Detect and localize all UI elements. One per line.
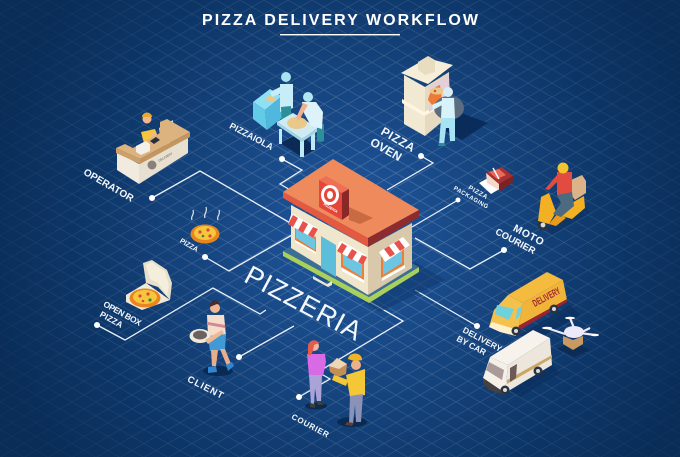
- icon: white delivery van: [483, 330, 560, 397]
- windows: [295, 226, 316, 252]
- label: Pizza Packaging: PIZZA: [467, 184, 489, 201]
- awnings: [288, 214, 319, 238]
- connector: pizzaiola: [279, 156, 302, 191]
- label: Moto Courier: MOTO: [511, 222, 546, 248]
- rear wheel: [573, 201, 583, 211]
- icon: pizzeria building: [283, 159, 445, 312]
- courier: [332, 353, 365, 426]
- label: Open box pizza: PIZZA: [98, 309, 125, 330]
- icon: operator desk: [116, 112, 190, 184]
- monitor: [159, 120, 173, 144]
- delivery box: [571, 175, 586, 200]
- connector: pizza: [202, 235, 292, 271]
- front wheel: [538, 220, 548, 230]
- icon: open pizza box: [126, 260, 172, 310]
- icon: pizzaiola staff: [253, 72, 324, 157]
- connector: open box pizza: [94, 288, 266, 340]
- label: Pizzeria: PIZZERIA: [240, 260, 367, 346]
- customer: [307, 340, 326, 408]
- connector: courier: [296, 302, 403, 400]
- connector: pizza packaging: [412, 198, 460, 227]
- label: Pizza: PIZZA: [178, 238, 199, 254]
- connector: moto courier: [415, 238, 507, 269]
- parcel: [329, 358, 347, 377]
- baker: [441, 98, 455, 118]
- label: Pizzaiola: PIZZAIOLA: [228, 121, 275, 152]
- icon: drone: [542, 317, 599, 357]
- label: Pizza Packaging: PACKAGING: [452, 186, 489, 211]
- icon: yellow delivery van: DELIVERY: [531, 286, 563, 310]
- icon: customer and courier: [305, 340, 367, 427]
- label: Client: CLIENT: [185, 374, 225, 402]
- icon: moto courier: [538, 162, 590, 235]
- connector: pizza oven: [387, 153, 433, 190]
- operator: [141, 112, 160, 147]
- icon: pizza oven: [401, 56, 488, 146]
- label: Pizza Oven: PIZZA: [378, 124, 418, 155]
- door: [321, 236, 336, 277]
- table: [279, 129, 282, 144]
- rider: [557, 172, 572, 195]
- connector: client: [236, 326, 294, 360]
- label: Moto Courier: COURIER: [493, 227, 537, 257]
- chef 2: [317, 124, 324, 142]
- scooter body: [538, 193, 556, 224]
- icon: client with pizza box: [190, 300, 234, 376]
- label: Operator: OPERATOR: [81, 167, 136, 205]
- label: Courier: COURIER: [290, 412, 331, 439]
- icon: pizzeria building: PIZZERIA: [323, 202, 339, 214]
- counter: [253, 89, 282, 110]
- connector: delivery by car: [415, 290, 480, 329]
- label: Delivery by car: BY CAR: [455, 333, 488, 357]
- icon: yellow delivery van: [489, 272, 580, 343]
- rooftop sign: [319, 176, 349, 193]
- label: Pizza Oven: OVEN: [368, 135, 404, 164]
- chef 1: [280, 84, 293, 112]
- label: Open box pizza: OPEN BOX: [102, 299, 144, 328]
- icon: pizza: [190, 207, 220, 244]
- label: Delivery by car: DELIVERY: [461, 325, 504, 354]
- roof: [283, 159, 419, 238]
- icon: pizza packaging: [479, 167, 513, 194]
- title: PIZZA DELIVERY WORKFLOW: [202, 12, 479, 29]
- icon: operator desk: DELIVERY: [158, 151, 174, 163]
- connector: operator: [149, 171, 292, 224]
- label: Pizza Oven: [368, 124, 418, 164]
